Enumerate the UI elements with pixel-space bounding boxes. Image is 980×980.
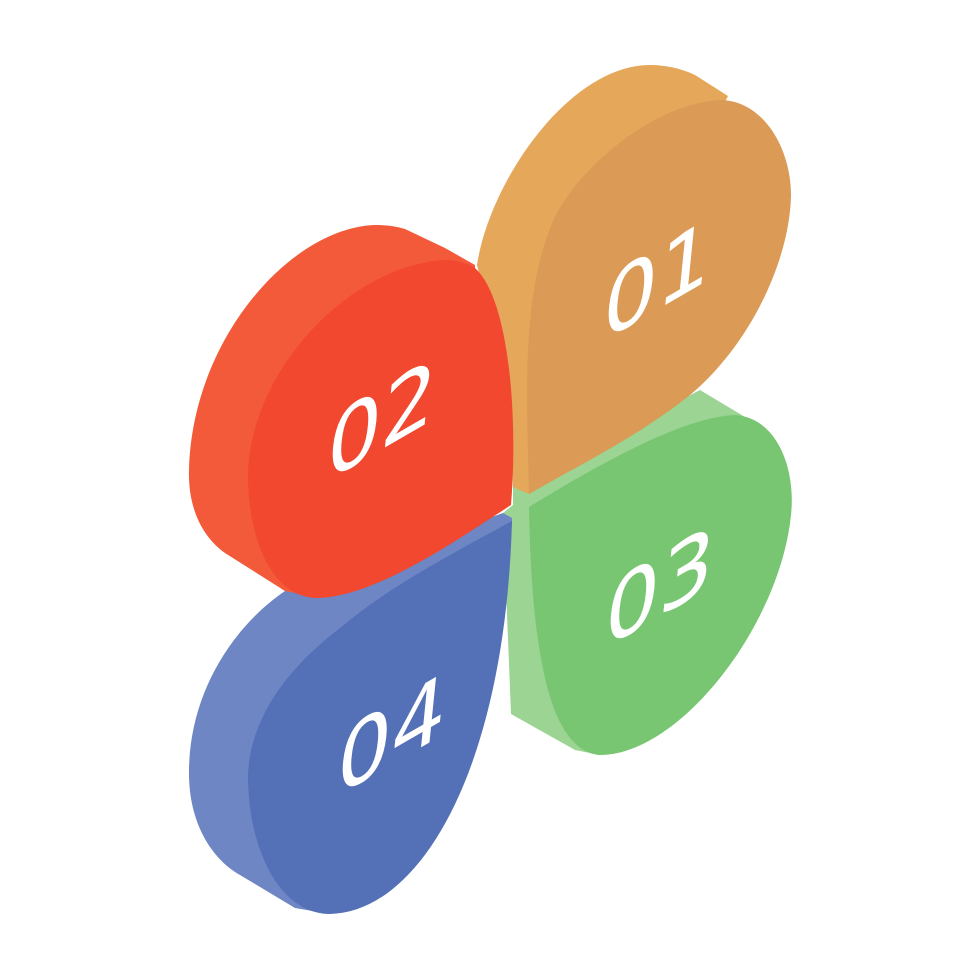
label 03: 03 (600, 504, 719, 671)
label 04: 04 (332, 652, 451, 819)
label 02: 02 (322, 337, 441, 504)
petal 02: red (189, 225, 513, 598)
petal 04: blue (189, 513, 512, 914)
petal 01: orange (477, 65, 791, 494)
petal 03: green (503, 390, 792, 755)
label 01: 01 (598, 197, 717, 364)
